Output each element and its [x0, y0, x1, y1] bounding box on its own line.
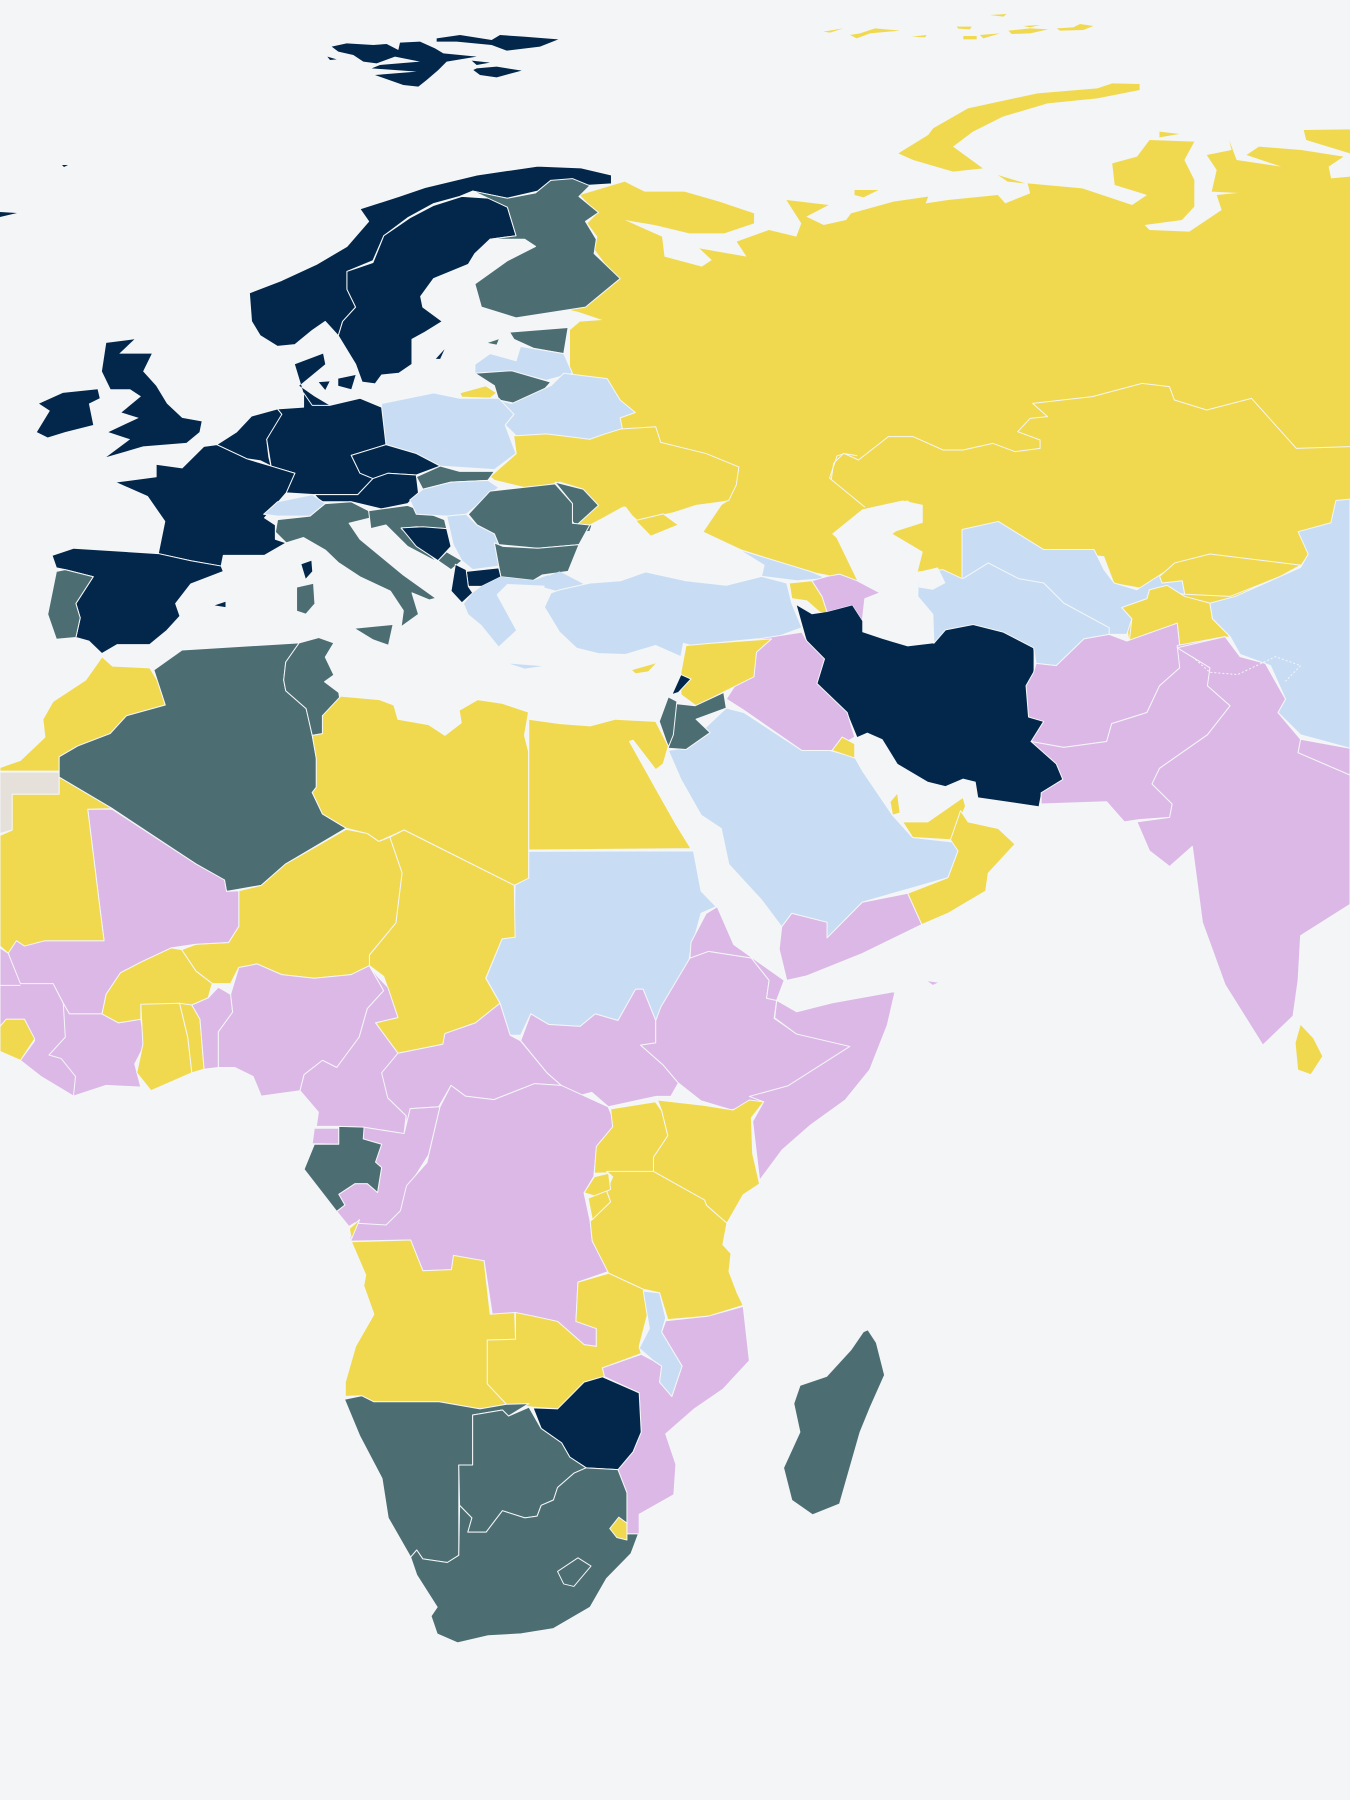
country: Oman — [908, 811, 1015, 925]
country: Ireland — [37, 389, 100, 437]
country: Eswatini — [610, 1517, 627, 1540]
country: Madagascar — [784, 1330, 884, 1514]
country: Lesotho — [558, 1558, 591, 1586]
countries: Benelux — [217, 409, 282, 466]
country: Saudi Arabia — [668, 708, 958, 938]
island: Corsica — [301, 561, 312, 579]
country: Syria — [681, 639, 772, 706]
country: Israel — [659, 697, 677, 747]
country: Austria — [314, 473, 418, 509]
country: Tajikistan — [1122, 585, 1230, 646]
country: India — [1137, 637, 1350, 1045]
country: Malawi — [639, 1291, 682, 1396]
country: Qatar — [890, 793, 900, 815]
country: Turkey — [544, 572, 802, 657]
country: UAE — [903, 797, 966, 840]
country: Niger — [182, 829, 402, 984]
country: Ghana — [137, 1003, 192, 1091]
region: Europe — [37, 166, 635, 669]
country: Kyrgyzstan — [1160, 554, 1301, 596]
country: Portugal — [48, 570, 93, 639]
country: Ethiopia — [641, 951, 850, 1110]
country: Kenya — [653, 1100, 764, 1223]
countries: Senegal to Cote d'Ivoire — [0, 948, 145, 1096]
country: North Macedonia — [466, 568, 501, 586]
country: Chad — [369, 830, 515, 1053]
country: Libya — [312, 696, 529, 885]
country: Guinea — [0, 1019, 35, 1060]
country: Latvia — [475, 346, 572, 380]
countries: southern Russia, Kazakhstan, Ukraine — [490, 400, 1350, 646]
country: Nigeria — [218, 964, 384, 1096]
country: Mali — [8, 809, 239, 1014]
country: Republic of Congo — [337, 1107, 440, 1226]
country: Tunisia — [284, 638, 341, 735]
country: South Sudan — [521, 989, 678, 1107]
country: Belarus — [499, 373, 635, 439]
island: Sicily — [356, 625, 392, 645]
island: Cyprus — [632, 663, 656, 673]
country: Greece — [464, 575, 549, 646]
country: Benin — [192, 987, 233, 1069]
region: East and Southern Africa — [344, 991, 895, 1643]
country: Spain — [52, 548, 223, 654]
country: Namibia — [344, 1396, 529, 1562]
country: Mozambique — [602, 1306, 749, 1534]
country: Czechia — [351, 445, 440, 479]
territory: Western Sahara — [0, 772, 59, 834]
sea: Kara-Bogaz — [919, 567, 945, 590]
territory: Kaliningrad — [460, 386, 497, 398]
country: Poland — [382, 393, 516, 470]
country: Burundi — [588, 1191, 611, 1220]
country: Burkina Faso — [102, 948, 212, 1023]
country: Estonia — [510, 327, 568, 354]
country: Sri Lanka — [1296, 1025, 1322, 1074]
country: South Africa — [411, 1468, 638, 1643]
region: Middle East, Central and South Asia — [486, 499, 1350, 1110]
country: Kuwait — [832, 737, 855, 758]
country: Serbia — [447, 514, 499, 570]
country: Azerbaijan — [812, 574, 880, 621]
country: northern Russia and Arctic islands — [570, 83, 1350, 480]
country: Cameroon — [300, 966, 406, 1134]
country: Lithuania — [475, 371, 551, 404]
country: China — [1210, 499, 1350, 748]
country: Pakistan — [1031, 637, 1240, 822]
country: Hungary — [410, 480, 499, 516]
country: Georgia — [739, 550, 827, 581]
country: Yemen — [779, 893, 922, 980]
country: Gabon — [304, 1126, 382, 1211]
border: Russia and Kazakhstan — [831, 383, 1350, 480]
country: Croatia and Slovenia — [369, 505, 447, 562]
peninsula: Crimea — [636, 514, 678, 536]
country: Tanzania — [590, 1171, 743, 1320]
country: Armenia — [789, 581, 830, 614]
country: Rwanda — [584, 1173, 611, 1196]
country: Iraq — [726, 632, 855, 750]
island group: Svalbard — [327, 35, 558, 87]
country: Morocco — [0, 657, 165, 771]
country: Iran — [797, 605, 1063, 806]
sea: Black Sea — [568, 507, 764, 585]
country: Togo — [180, 1003, 204, 1073]
region: North, West and Central Africa — [0, 638, 561, 1226]
country: Finland — [473, 179, 620, 318]
country: Algeria — [59, 643, 346, 891]
country: Angola — [345, 1240, 516, 1409]
country: Egypt — [529, 719, 691, 850]
country: DR Congo — [349, 1084, 616, 1346]
country: Sweden — [338, 196, 516, 384]
country: Germany — [267, 393, 386, 495]
country: Montenegro — [438, 552, 462, 570]
country: Italy — [275, 502, 436, 627]
island: Sardinia — [297, 584, 314, 614]
country: Zambia — [487, 1273, 649, 1409]
country: Mauritania — [0, 777, 112, 953]
country: Romania — [468, 484, 590, 548]
country: Afghanistan — [1026, 623, 1180, 747]
country: Botswana — [459, 1407, 586, 1532]
country: Albania — [451, 564, 473, 603]
sea: Sea of Azov — [668, 500, 729, 525]
country: Denmark — [295, 354, 356, 409]
sea: Caspian — [832, 500, 934, 646]
country: Slovakia — [416, 466, 494, 489]
country: Equatorial Guinea — [312, 1128, 339, 1144]
country: United Kingdom — [102, 339, 202, 457]
country: Somalia — [749, 991, 895, 1180]
country: Bulgaria — [494, 543, 579, 580]
country: Nepal — [1298, 739, 1350, 775]
country: Norway — [249, 166, 611, 346]
country: Central African Republic — [382, 1003, 561, 1126]
country: Uganda — [594, 1102, 668, 1173]
island group: Franz Josef Land — [823, 14, 1093, 39]
country: Lebanon — [672, 675, 691, 695]
country: Bosnia — [401, 527, 451, 561]
territory: Cabinda — [349, 1220, 360, 1239]
small navy islands at top left — [0, 165, 68, 217]
country: France — [115, 445, 295, 566]
country: Zimbabwe — [533, 1377, 641, 1470]
country: Sudan — [486, 851, 716, 1035]
country: Moldova — [555, 482, 598, 532]
country: Eritrea — [690, 907, 784, 1000]
country: Jordan — [668, 692, 726, 750]
countries: Turkmenistan and Uzbekistan — [918, 521, 1185, 666]
country: Switzerland — [264, 495, 325, 516]
